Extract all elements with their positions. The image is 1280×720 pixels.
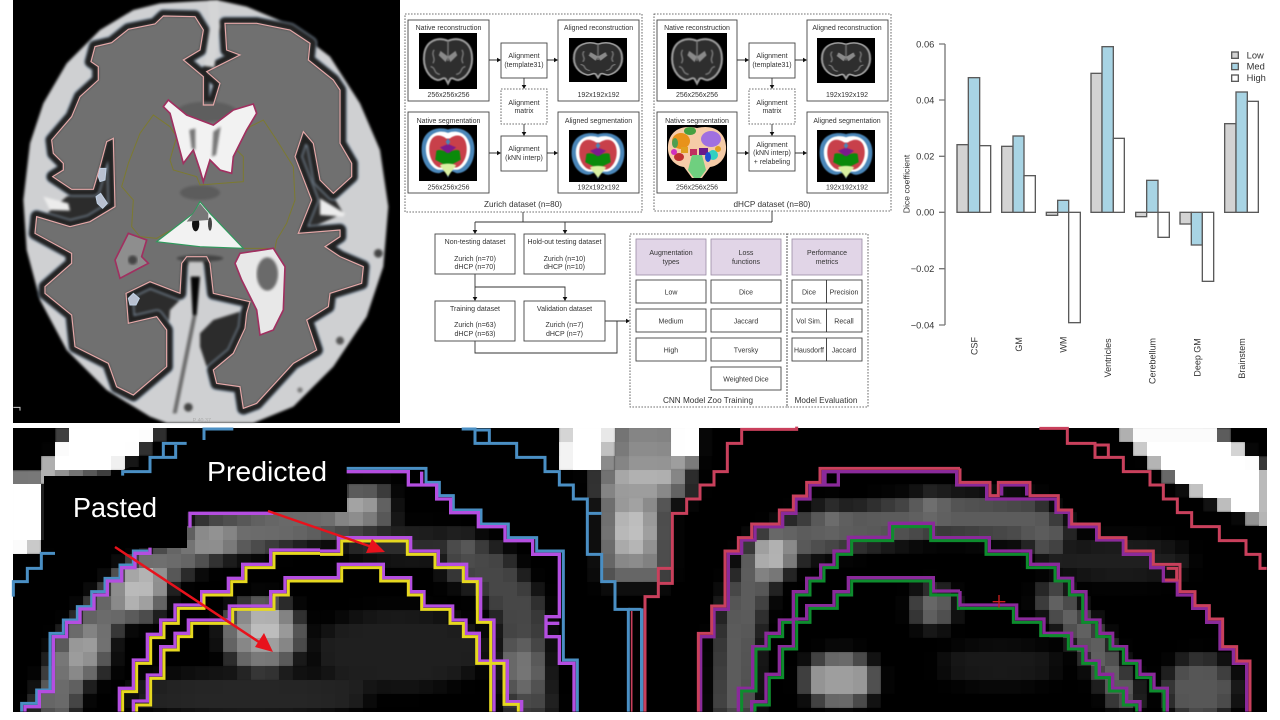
native reconstruction box: Native reconstruction [416, 25, 481, 32]
red line beside blue [629, 611, 634, 712]
x axis category labels: GM [1014, 337, 1024, 352]
alignment kNN relabeling box [749, 136, 795, 171]
aligned segmentation box: Aligned segmentation [813, 118, 881, 125]
alignment matrix box [501, 89, 547, 124]
x axis category labels: Cerebellum [1148, 338, 1158, 384]
pasted contour (bright purple) [25, 513, 320, 712]
alignment kNN relabeling box: (kNN interp) [753, 150, 791, 157]
loss functions column: functions [732, 259, 761, 266]
box: non-testing dataset [435, 234, 515, 274]
metric cells: Vol Sim. [796, 318, 822, 326]
loss functions column: Loss [739, 250, 754, 257]
metric cells [792, 280, 862, 361]
inner contours dark purple and green [738, 523, 960, 712]
box: training dataset: Training dataset [450, 306, 500, 313]
bars: CSF [957, 78, 991, 212]
panel: axial brain MRI with segmentation contours [13, 0, 400, 424]
aligned segmentation box: 192x192x192 [577, 184, 620, 192]
predicted contour (yellow) [123, 553, 320, 712]
box: non-testing dataset: dHCP (n=70) [455, 264, 495, 271]
aligned reconstruction box: 192x192x192 [826, 92, 868, 99]
bars: Ventricles [1091, 47, 1124, 212]
right cortex [735, 515, 1060, 720]
loss functions column [711, 239, 781, 390]
slice position label: P 40.37 [193, 418, 211, 424]
label: Predicted: Predicted [207, 456, 327, 487]
augmentation types column: High [664, 348, 678, 354]
midline column [595, 470, 690, 496]
box: training dataset [435, 301, 515, 341]
y axis: 0.06 [916, 39, 934, 49]
box: non-testing dataset: Non-testing dataset [445, 239, 505, 246]
alignment template box [501, 43, 547, 78]
panel: model evaluation: metrics [816, 259, 839, 266]
aligned segmentation box: 192x192x192 [826, 184, 868, 192]
y axis: Dice coefficient [901, 154, 911, 213]
alignment kNN box [501, 136, 547, 171]
metric cells: Precision [830, 290, 858, 296]
native segmentation box with multi-label atlas [657, 112, 737, 193]
box: validation dataset: Validation dataset [537, 306, 592, 313]
bars: GM [1002, 136, 1035, 212]
augmentation types column: Medium [659, 318, 684, 326]
native reconstruction box [657, 20, 737, 101]
box: hold-out testing dataset [524, 234, 605, 274]
bars: Deep GM [1180, 212, 1214, 281]
x axis category labels: CSF [969, 337, 979, 355]
box: training dataset: dHCP (n=63) [455, 331, 495, 338]
crimson and purple cortical contour right [960, 468, 1250, 712]
contours: left panel [13, 429, 320, 712]
native segmentation box: Native segmentation [417, 118, 481, 125]
metric cells: Recall [834, 318, 854, 326]
bar chart: Dice coefficient differences by region [901, 39, 1266, 384]
native reconstruction box [408, 20, 489, 101]
dHCP caption: dHCP dataset (n=80) [734, 200, 811, 209]
alignment matrix box: matrix [514, 108, 534, 115]
x axis category labels: Ventricles [1103, 338, 1113, 377]
alignment matrix box: Alignment [508, 100, 540, 107]
box: validation dataset: Zurich (n=7) [546, 322, 583, 329]
legend: High [1247, 73, 1266, 83]
box: validation dataset: dHCP (n=7) [546, 331, 583, 338]
yellow contour right [320, 541, 518, 712]
alignment template box: Alignment [508, 53, 540, 60]
augmentation types column [636, 239, 706, 361]
contours: right panel right half [960, 428, 1267, 712]
alignment template box [749, 43, 795, 78]
legend: Med [1247, 62, 1265, 72]
voxel image [13, 425, 1280, 720]
aligned reconstruction box: 192x192x192 [577, 92, 620, 99]
native reconstruction box: Native reconstruction [664, 25, 730, 32]
red outer contour [645, 427, 797, 712]
native segmentation box: 256x256x256 [427, 184, 470, 192]
contours: right panel left half [642, 427, 960, 712]
box: non-testing dataset: Zurich (n=70) [454, 256, 496, 263]
y axis: −0.04 [911, 320, 934, 330]
falx and bright clefts [209, 0, 215, 67]
black annotation backing [44, 467, 347, 548]
alignment template box: Alignment [756, 53, 788, 60]
bars: Brainstem [1225, 92, 1258, 212]
aligned reconstruction box [558, 20, 639, 101]
y axis: 0.04 [916, 95, 934, 105]
arrow: Pasted to contour [115, 547, 273, 652]
left cortex [50, 505, 390, 720]
segmentation: white matter contour [35, 16, 363, 408]
alignment kNN relabeling box: + relabeling [754, 159, 790, 166]
aligned segmentation box [558, 112, 639, 193]
aligned segmentation box [807, 112, 888, 193]
augmentation types column: Augmentation [649, 250, 693, 257]
native segmentation box [408, 112, 489, 193]
segmentation: left temporal horn [115, 233, 148, 278]
segmentation: lateral ventricles [163, 100, 257, 182]
arrow: Predicted to contour [268, 511, 385, 553]
alignment matrix box [749, 89, 795, 124]
augmentation types column: types [663, 259, 680, 266]
y axis: 0.00 [916, 208, 934, 218]
native reconstruction box: 256x256x256 [427, 92, 470, 99]
panel: model evaluation [787, 234, 868, 407]
loss functions column: Weighted Dice [723, 376, 769, 384]
blue contour centre [347, 429, 628, 712]
y axis: 0.02 [916, 152, 934, 162]
connector arrows between dataset blocks and splits [473, 211, 772, 353]
segmentation: right atrium ventricle [235, 248, 285, 335]
arrows [489, 58, 558, 155]
x axis category labels: WM [1059, 337, 1069, 353]
label: Pasted: Pasted [73, 492, 157, 523]
Zurich caption: Zurich dataset (n=80) [484, 200, 562, 209]
box: hold-out testing dataset: Zurich (n=10) [544, 256, 585, 263]
alignment kNN box: Alignment [508, 146, 540, 153]
red outer contour right [1039, 428, 1267, 568]
contours: centre panel [320, 429, 641, 712]
legend [1232, 50, 1266, 83]
loss functions column: Tversky [734, 348, 759, 354]
alignment template box: (template31) [504, 62, 544, 69]
box: training dataset: Zurich (n=63) [454, 322, 496, 329]
x axis category labels: Deep GM [1192, 338, 1202, 377]
alignment kNN relabeling box: Alignment [756, 142, 788, 149]
panel: CNN model zoo training [630, 234, 787, 407]
loss functions column: Dice [739, 290, 753, 296]
metric cells: Hausdorff [794, 348, 824, 354]
augmentation types column: Low [665, 290, 678, 296]
skull and scalp [23, 0, 388, 423]
flowchart: Zurich dataset block [405, 14, 642, 212]
segmentation: third ventricle [157, 202, 243, 248]
alignment matrix box: Alignment [756, 100, 788, 107]
native reconstruction box: 256x256x256 [676, 92, 718, 99]
box: validation dataset [524, 301, 605, 341]
box: hold-out testing dataset: dHCP (n=10) [544, 264, 585, 271]
loss functions column: Jaccard [734, 318, 758, 326]
native segmentation box with multi-label atlas: 256x256x256 [676, 184, 718, 192]
segmentation: small cystic spots [96, 168, 139, 305]
alignment matrix box: matrix [762, 108, 782, 115]
bars: Cerebellum [1136, 180, 1169, 237]
left outer band [450, 555, 530, 720]
segmentation: deep grey matter contour [122, 115, 295, 248]
inner contours right [960, 538, 1167, 712]
metric cells: Dice [802, 290, 816, 296]
crimson cortical contour [698, 468, 960, 712]
legend: Low [1247, 50, 1264, 60]
y axis [901, 39, 945, 330]
brain parenchyma [35, 16, 363, 408]
caption: Model Evaluation [795, 396, 858, 405]
native segmentation box with multi-label atlas: Native segmentation [665, 118, 729, 125]
aligned reconstruction box: Aligned reconstruction [564, 25, 633, 32]
crosshair [993, 595, 1005, 608]
bars: WM [1046, 200, 1080, 323]
flowchart: dHCP dataset block [654, 14, 891, 211]
box: hold-out testing dataset: Hold-out testing dataset [528, 239, 602, 246]
purple contour right [320, 472, 574, 712]
x axis category labels: Brainstem [1237, 338, 1247, 379]
alignment kNN box: (kNN interp) [505, 155, 543, 162]
caption: CNN Model Zoo Training [663, 396, 753, 405]
panel: zoomed pixel MRI with contours [13, 425, 1280, 720]
x axis category labels [969, 337, 1247, 384]
skull highlights [40, 428, 162, 478]
predicted/pasted skull contour (blue) [13, 429, 233, 712]
aligned segmentation box: Aligned segmentation [565, 118, 632, 125]
panel: model evaluation: Performance [807, 250, 847, 257]
alignment template box: (template31) [752, 62, 792, 69]
y axis: −0.02 [911, 264, 934, 274]
arrows [737, 58, 807, 155]
aligned reconstruction box: Aligned reconstruction [812, 25, 882, 32]
aligned reconstruction box [807, 20, 888, 101]
metric cells: Jaccard [832, 348, 856, 354]
